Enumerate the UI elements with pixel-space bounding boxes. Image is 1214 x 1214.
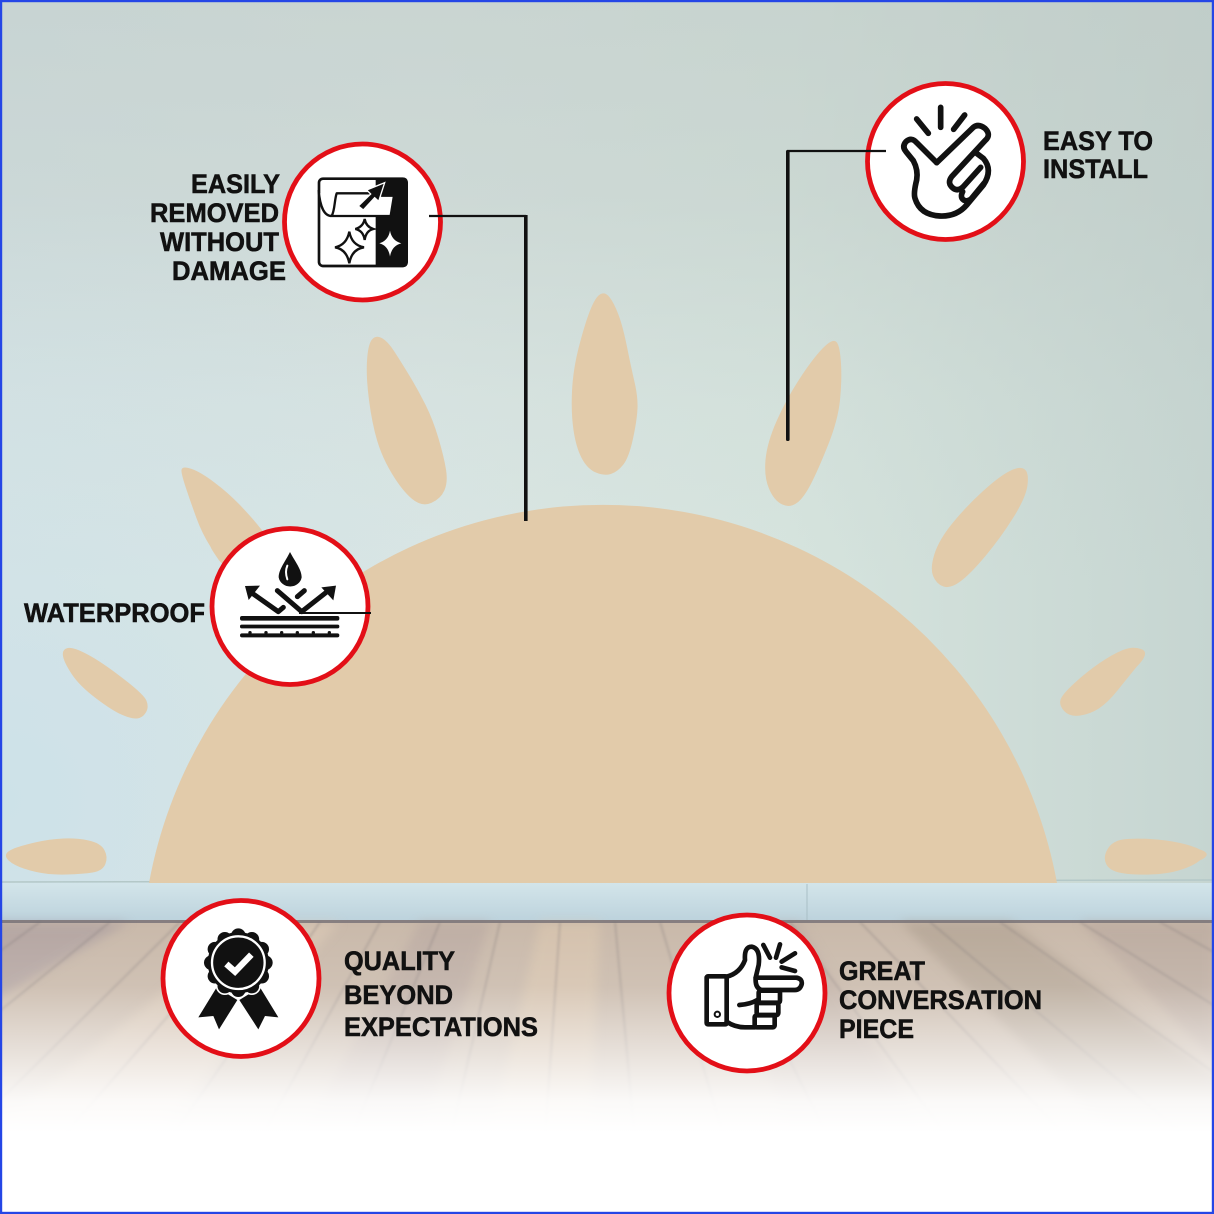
callout line: waterproof to sun xyxy=(299,612,371,614)
sun ray: right upper xyxy=(933,469,1027,586)
label: quality beyond expectations: QUALITY xyxy=(344,946,455,976)
label: great conversation piece xyxy=(839,956,1042,1044)
sun ray: left upper xyxy=(182,468,263,573)
badge circle xyxy=(212,528,368,684)
feature: waterproof xyxy=(24,528,368,684)
icon: finger snap hand xyxy=(904,107,988,216)
sun ray: right bottom xyxy=(1106,840,1206,874)
label: easily removed without damage: WITHOUT xyxy=(160,227,279,257)
label: easily removed without damage: DAMAGE xyxy=(172,256,286,286)
label: quality beyond expectations: BEYOND xyxy=(344,980,453,1010)
icon: pointing hand with snap xyxy=(707,944,802,1027)
label: easy to install: EASY TO xyxy=(1043,126,1153,156)
feature: quality beyond expectations xyxy=(163,900,538,1056)
sun decal xyxy=(7,294,1206,883)
icon: peeling sticker xyxy=(319,178,408,267)
label: quality beyond expectations xyxy=(344,946,538,1042)
callout line: vertical drop to ray xyxy=(786,150,790,441)
feature: easy to install xyxy=(868,84,1153,240)
sun ray: upper right xyxy=(766,342,840,505)
wall background xyxy=(0,0,1214,890)
sun ray: upper left xyxy=(368,338,446,503)
callout line: install to ray xyxy=(787,150,886,152)
wooden floor xyxy=(0,920,1214,1214)
sun half disc xyxy=(149,505,1057,883)
label: easily removed without damage xyxy=(150,169,286,286)
icon: water repelling layers xyxy=(240,552,339,637)
feature: easily removed without damage xyxy=(150,144,440,300)
badge circle xyxy=(163,900,319,1056)
label: great conversation piece: GREAT xyxy=(839,956,925,986)
sun ray: top xyxy=(573,294,637,474)
label: quality beyond expectations: EXPECTATIONS xyxy=(344,1012,538,1042)
icon: quality rosette xyxy=(198,928,278,1029)
sun ray: left bottom xyxy=(7,839,106,874)
label: great conversation piece: CONVERSATION xyxy=(839,985,1042,1015)
feature: great conversation piece xyxy=(669,915,1042,1071)
label: easy to install: INSTALL xyxy=(1043,154,1148,184)
label: easily removed without damage: REMOVED xyxy=(150,198,279,228)
badge circle xyxy=(284,144,440,300)
badge circle xyxy=(868,84,1024,240)
sun ray: left middle xyxy=(64,649,147,718)
sun ray: right middle xyxy=(1061,649,1144,715)
callout line: removed to sun xyxy=(429,215,526,217)
callout line: vertical drop to sun xyxy=(524,215,528,521)
badge circle xyxy=(669,915,825,1071)
baseboard xyxy=(0,880,1214,922)
label: easy to install xyxy=(1043,126,1153,184)
label: easily removed without damage: EASILY xyxy=(191,169,280,199)
label: waterproof: WATERPROOF xyxy=(24,598,205,628)
label: great conversation piece: PIECE xyxy=(839,1014,914,1044)
